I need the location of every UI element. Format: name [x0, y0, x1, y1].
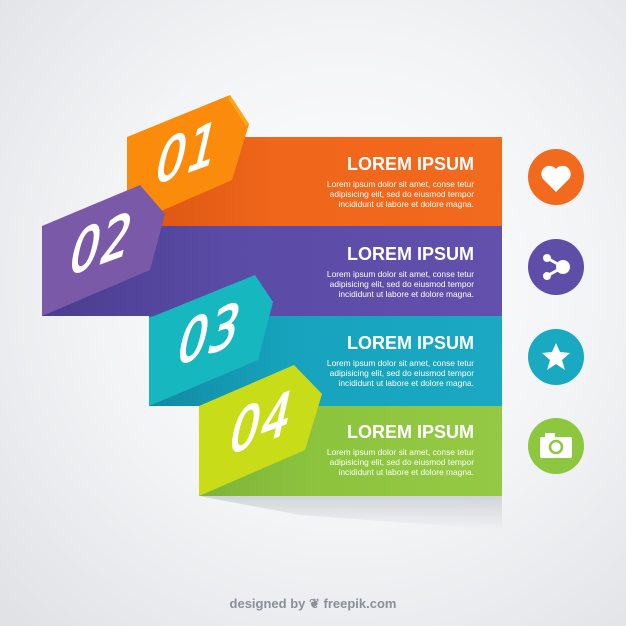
band 4: green: LOREM IPSUM [347, 422, 474, 442]
band 2: purple: adipisicing elit, sed do eiusmod tempor [330, 279, 474, 289]
band 2: purple [42, 226, 502, 316]
tag 01: 01 [149, 107, 227, 200]
band 4: green [199, 406, 502, 496]
band 4: green: Lorem ipsum dolor sit amet, conse tetur [327, 447, 474, 457]
band 1: orange: incididunt ut labore et dolore magna. [338, 199, 474, 209]
band 2: purple: incididunt ut labore et dolore magna. [338, 289, 474, 299]
icon: star [528, 329, 584, 385]
tag 02 [42, 185, 165, 316]
tag 03 [149, 275, 273, 406]
band 1: orange: adipisicing elit, sed do eiusmod tempor [330, 189, 474, 199]
band 1: orange: Lorem ipsum dolor sit amet, conse tetur [327, 179, 474, 189]
tag 04: 04 [223, 377, 301, 470]
band 1: orange: LOREM IPSUM [347, 154, 474, 174]
icon: heart [528, 149, 584, 205]
band 3: teal [149, 316, 502, 406]
icon: share [528, 239, 584, 295]
band 2: purple: Lorem ipsum dolor sit amet, conse tetur [327, 269, 474, 279]
tag 03: 03 [171, 288, 249, 381]
band 1: orange [127, 137, 502, 227]
tag 01 [127, 95, 249, 226]
band 4: green: incididunt ut labore et dolore magna. [338, 467, 474, 477]
tag 02: 02 [63, 198, 141, 291]
band 3: teal: Lorem ipsum dolor sit amet, conse tetur [327, 358, 474, 368]
shadow under bands [199, 496, 502, 530]
tag 04 [199, 365, 322, 496]
band 4: green: adipisicing elit, sed do eiusmod tempor [330, 457, 474, 467]
footer credit: designed by ❦ freepik.com [230, 596, 396, 611]
band 3: teal: adipisicing elit, sed do eiusmod tempor [330, 368, 474, 378]
band 2: purple: LOREM IPSUM [347, 244, 474, 264]
icon: camera [528, 418, 584, 474]
band 3: teal: LOREM IPSUM [347, 333, 474, 353]
band 3: teal: incididunt ut labore et dolore magna. [338, 378, 474, 388]
